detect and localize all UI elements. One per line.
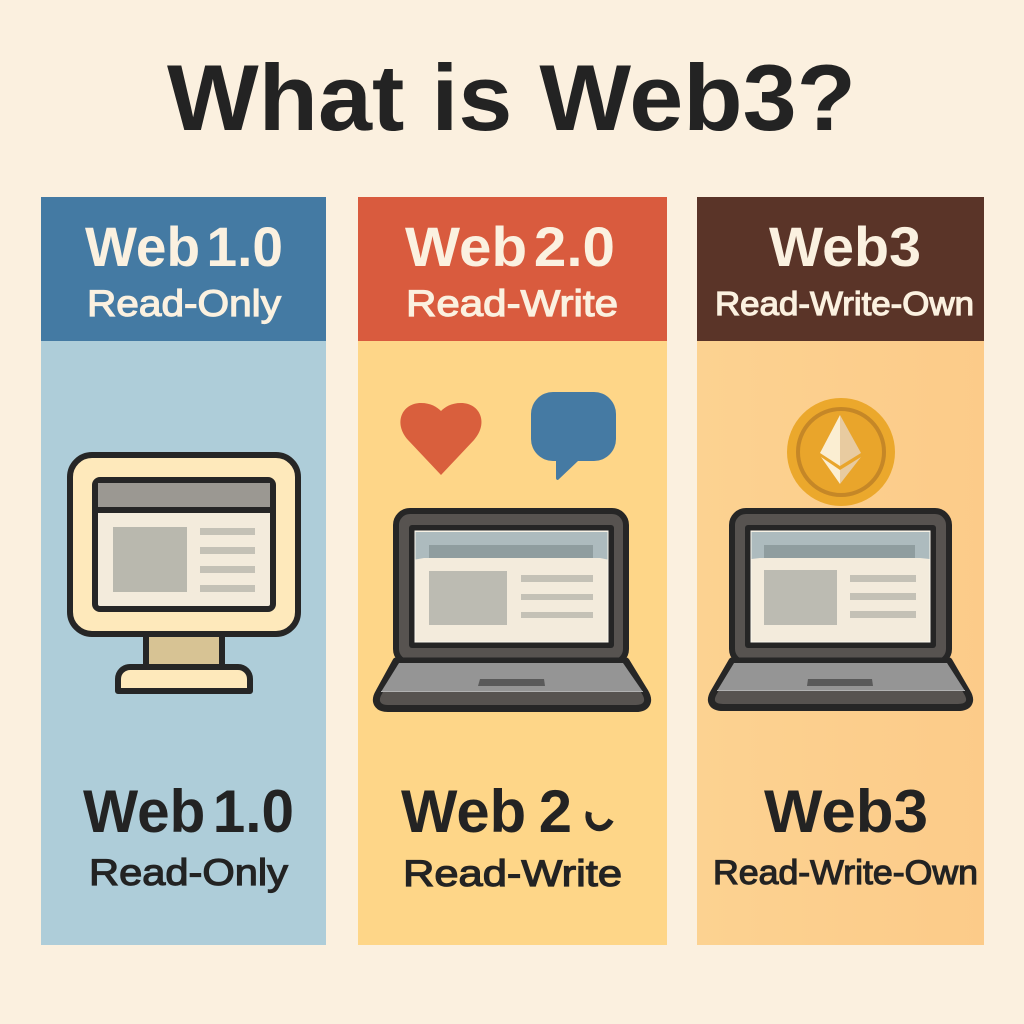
panel: Web 1.0 <box>41 197 326 945</box>
panel header: Read-Only <box>87 283 282 324</box>
panel header: Read-Write <box>406 283 618 324</box>
icon: speech bubble <box>531 392 616 480</box>
icon: desktop monitor <box>70 455 298 691</box>
title: What is Web3? <box>167 45 856 150</box>
icon: laptop <box>376 511 648 708</box>
panel caption <box>401 778 622 894</box>
panel body <box>41 341 326 945</box>
panel caption <box>83 778 294 893</box>
panel header <box>697 197 984 341</box>
panel body <box>697 341 984 945</box>
panel header: Web3 <box>769 215 921 278</box>
panel header <box>358 197 667 341</box>
panel caption <box>713 778 978 892</box>
panel caption: Web 1.0 <box>83 778 294 845</box>
icon: laptop <box>711 511 970 708</box>
panel: Web 2.0 <box>358 197 667 945</box>
panel body <box>358 341 667 945</box>
panel header: Read-Write-Own <box>715 285 974 322</box>
panel header <box>41 197 326 341</box>
panel header: Web 1.0 <box>85 215 283 278</box>
panel caption: Web 2 <box>401 778 572 845</box>
icon: ethereum coin <box>787 398 895 506</box>
panel caption: Read-Only <box>89 852 289 893</box>
panel caption: Web3 <box>764 778 928 845</box>
panel caption: Read-Write <box>403 853 622 894</box>
panel caption: Read-Write-Own <box>713 854 978 892</box>
panel header: Web 2.0 <box>405 215 615 278</box>
panel: Web3 <box>697 197 984 945</box>
icon: heart <box>400 403 482 475</box>
clipped glyph fragment <box>588 812 611 828</box>
